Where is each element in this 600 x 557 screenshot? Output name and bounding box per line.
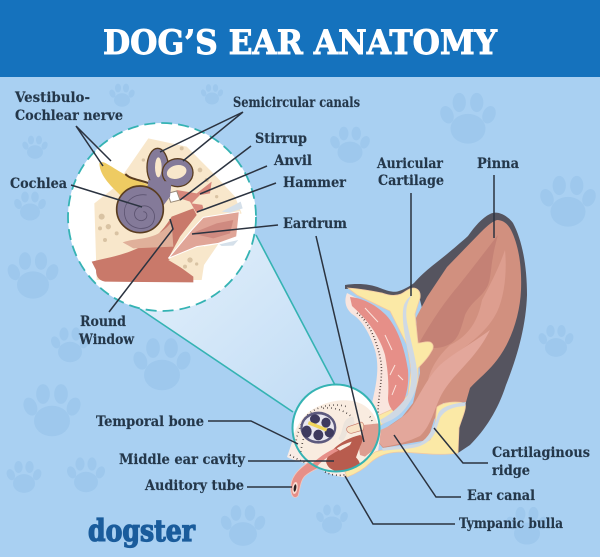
line: auricular cartilage [410,193,412,296]
label: round window: Window [78,332,135,348]
bone speckles [98,146,218,242]
pinna pink [370,220,521,448]
label: eardrum: Eardrum [283,216,347,232]
line: pinna [493,175,495,238]
vestibulocochlear nerve [99,162,157,197]
bulla speckles [290,455,374,475]
ossicles [177,182,212,213]
line: tympanic bulla [345,476,455,524]
labels [10,90,590,532]
line: eardrum detail [192,225,278,234]
cochlea cross section [300,412,336,444]
yellow cartilage upper [348,288,433,430]
cochlea spiral [117,186,163,233]
line: round window [109,219,173,312]
label: tympanic bulla: Tympanic bulla [459,516,563,532]
grey slivers [222,202,243,213]
line: hammer [197,183,276,212]
label: auricular cartilage: Cartilage [378,173,444,189]
line: cartilaginous ridge [434,428,488,463]
zoom beam [140,235,335,412]
line: cochlea [71,185,142,207]
label: auricular cartilage: Auricular [376,156,444,172]
line: middle ear cavity [248,460,334,462]
bulla and temporal bone [287,391,380,477]
title: DOG’S EAR ANATOMY [103,23,498,63]
label: auditory tube: Auditory tube [144,478,244,494]
small detail circle: temporal bone and middle ear [292,384,380,472]
label: temporal bone: Temporal bone [96,414,204,430]
grey lower strip [382,402,466,451]
middle ear cavity [326,435,362,472]
petrous red tissue [92,208,197,282]
semicircular canals [147,148,193,187]
label: cartilaginous ridge: ridge [492,463,530,479]
label: ear canal: Ear canal [467,488,535,504]
logo: dogster: dogster [88,514,196,549]
teal ring [292,384,380,472]
bone speckle [295,404,374,452]
bone [94,138,242,280]
label: semicircular canals: Semicircular canals [233,95,360,111]
ear anatomy illustration [287,213,527,497]
header banner [0,0,600,77]
label: middle ear cavity: Middle ear cavity [119,452,246,468]
label: vestibulo-cochlear nerve: Vestibulo- [14,90,90,106]
label: stirrup: Stirrup [255,131,307,147]
bony lining [338,417,355,442]
line: auditory tube [247,486,292,488]
line: semicircular canals [160,112,243,161]
canal tissue [359,424,378,456]
leader lines [71,112,494,524]
pink canal wall [350,297,408,414]
auditory tube [291,450,334,497]
label: pinna: Pinna [477,156,519,172]
line: ear canal [394,435,461,497]
grey cartilage strip [380,295,417,424]
line: vestibulo-cochlear [76,126,111,166]
line: anvil [200,166,267,194]
ear canal lower pinna shading [370,330,490,447]
label: vestibulo-cochlear nerve: Cochlear nerve [15,108,123,124]
label: anvil: Anvil [273,153,312,169]
temporal bone [294,400,378,470]
line: temporal bone [208,421,298,444]
label: round window: Round [80,314,126,330]
large detail circle: inner ear [68,123,256,311]
label: hammer: Hammer [283,175,347,191]
yellow cartilage lower [345,402,465,477]
label: cochlea: Cochlea [10,176,67,192]
ear canal section [168,212,239,258]
outer canal lining with cerumen glands [345,293,395,425]
pinna dark outer [345,213,527,453]
line: eardrum [316,236,364,442]
label: cartilaginous ridge: Cartilaginous [492,445,590,461]
line: stirrup [180,146,251,200]
yellow canal [364,456,368,460]
